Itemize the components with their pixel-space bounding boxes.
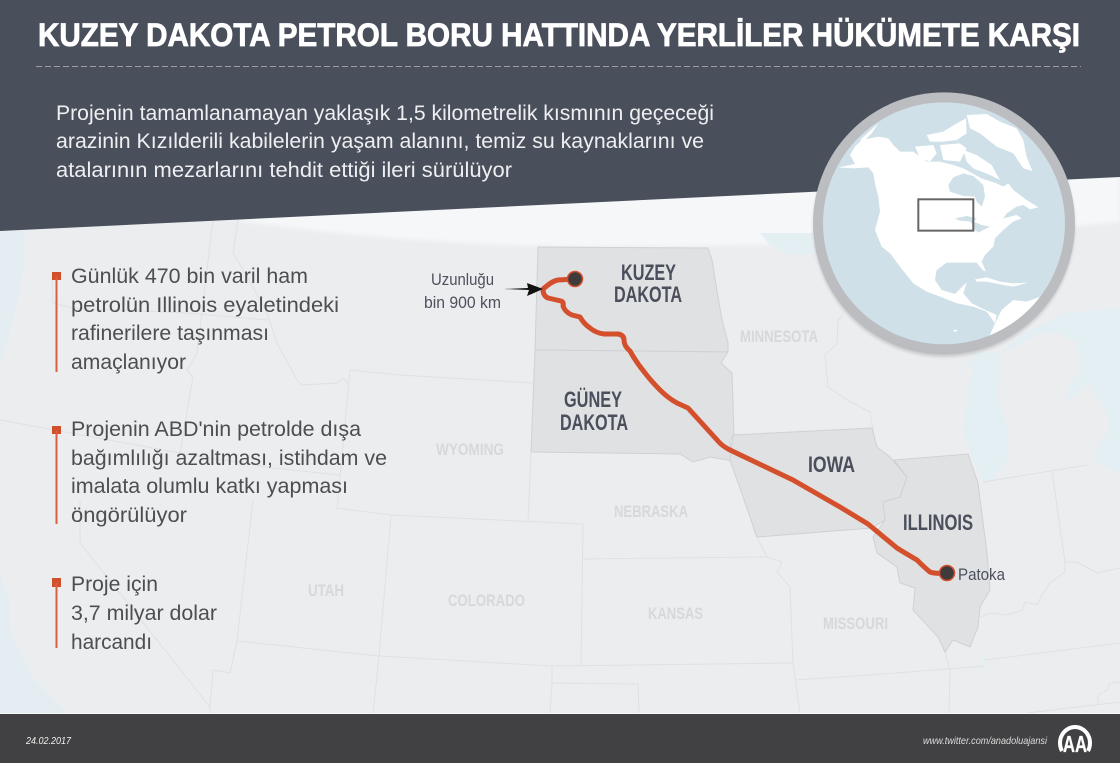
highlighted state labels: GÜNEY bbox=[564, 387, 622, 412]
bullet: daily barrels bbox=[52, 265, 339, 374]
locator rectangle bbox=[918, 199, 973, 231]
north america landmass bbox=[838, 137, 1038, 323]
footer bar bbox=[0, 713, 1120, 763]
bullet: cost: Proje için bbox=[71, 573, 158, 596]
bullet: dependency and employment: bağımlılığı azaltması, istihdam ve bbox=[71, 447, 387, 470]
unselected state labels: COLORADO bbox=[448, 591, 525, 610]
bullet: cost: 3,7 milyar dolar bbox=[71, 602, 217, 625]
pacific ocean bbox=[0, 231, 68, 714]
bullet: daily barrels: rafinerilere taşınması bbox=[71, 322, 269, 345]
arctic islands bbox=[963, 150, 1000, 180]
gulf of california bbox=[891, 254, 892, 256]
logo: Anadolu Agency: AA bbox=[1063, 731, 1087, 757]
unselected state labels: KANSAS bbox=[648, 604, 703, 623]
south america bbox=[990, 297, 1040, 336]
highlighted state labels: IOWA bbox=[808, 452, 855, 477]
map background bbox=[0, 165, 1120, 715]
iowa bbox=[730, 428, 907, 537]
pipeline route bbox=[543, 272, 954, 580]
siberian sliver bbox=[860, 123, 878, 140]
length label: Uzunluğu bbox=[431, 271, 494, 289]
length label bbox=[424, 271, 501, 312]
bullet: dependency and employment: öngörülüyor bbox=[71, 504, 187, 527]
bullet: dependency and employment: imalata olumlu katkı yapması bbox=[71, 475, 348, 498]
highlighted state labels bbox=[560, 260, 973, 535]
hudson bay bbox=[948, 173, 985, 207]
bullet: dependency and employment: Projenin ABD'nin petrolde dışa bbox=[71, 418, 361, 441]
date: 24.02.2017 bbox=[25, 736, 71, 747]
highlighted state labels: DAKOTA bbox=[560, 410, 628, 435]
greenland bbox=[967, 114, 1032, 171]
highlighted state labels: KUZEY bbox=[621, 260, 676, 285]
intro text: atalarının mezarlarını tehdit ettiği ileri sürülüyor bbox=[56, 159, 512, 182]
highlighted states bbox=[531, 247, 990, 652]
caribbean islands bbox=[975, 277, 1028, 287]
unselected state labels: UTAH bbox=[308, 581, 344, 600]
illinois bbox=[873, 454, 990, 652]
header panel bbox=[0, 0, 1120, 231]
unselected state labels: MINNESOTA bbox=[740, 327, 818, 346]
bullet: daily barrels: petrolün Illinois eyaletindeki bbox=[71, 294, 339, 317]
bullet: cost bbox=[52, 573, 217, 654]
bullet: daily barrels: Günlük 470 bin varil ham bbox=[71, 265, 308, 288]
intro text: arazinin Kızılderili kabilelerin yaşam alanını, temiz su kaynaklarını ve bbox=[56, 130, 704, 153]
highlighted state labels: DAKOTA bbox=[614, 282, 682, 307]
globe locator bbox=[813, 92, 1075, 357]
length label: bin 900 km bbox=[424, 294, 501, 312]
bullet: daily barrels: amaçlanıyor bbox=[71, 351, 186, 374]
north dakota bbox=[535, 247, 728, 352]
intro text: Projenin tamamlanamayan yaklaşık 1,5 kilometrelik kısmının geçeceği bbox=[56, 102, 714, 125]
unselected state labels: NEBRASKA bbox=[614, 502, 688, 521]
great lakes on globe bbox=[955, 216, 990, 233]
unselected state labels: MISSOURI bbox=[823, 614, 888, 633]
arrow: pipeline length bbox=[504, 283, 543, 296]
highlighted state labels: ILLINOIS bbox=[903, 510, 973, 535]
logo: Anadolu Agency bbox=[1060, 727, 1090, 757]
south dakota bbox=[531, 350, 734, 463]
great lakes bbox=[760, 233, 1120, 683]
label: Patoka: Patoka bbox=[958, 566, 1006, 584]
bullet: cost: harcandı bbox=[71, 631, 152, 654]
twitter url: www.twitter.com/anadoluajansi bbox=[923, 735, 1048, 747]
unselected state labels bbox=[308, 327, 888, 633]
intro text bbox=[56, 102, 714, 182]
bullet: dependency and employment bbox=[52, 418, 387, 527]
unselected state labels: WYOMING bbox=[436, 440, 504, 459]
state border lines bbox=[0, 220, 1120, 714]
